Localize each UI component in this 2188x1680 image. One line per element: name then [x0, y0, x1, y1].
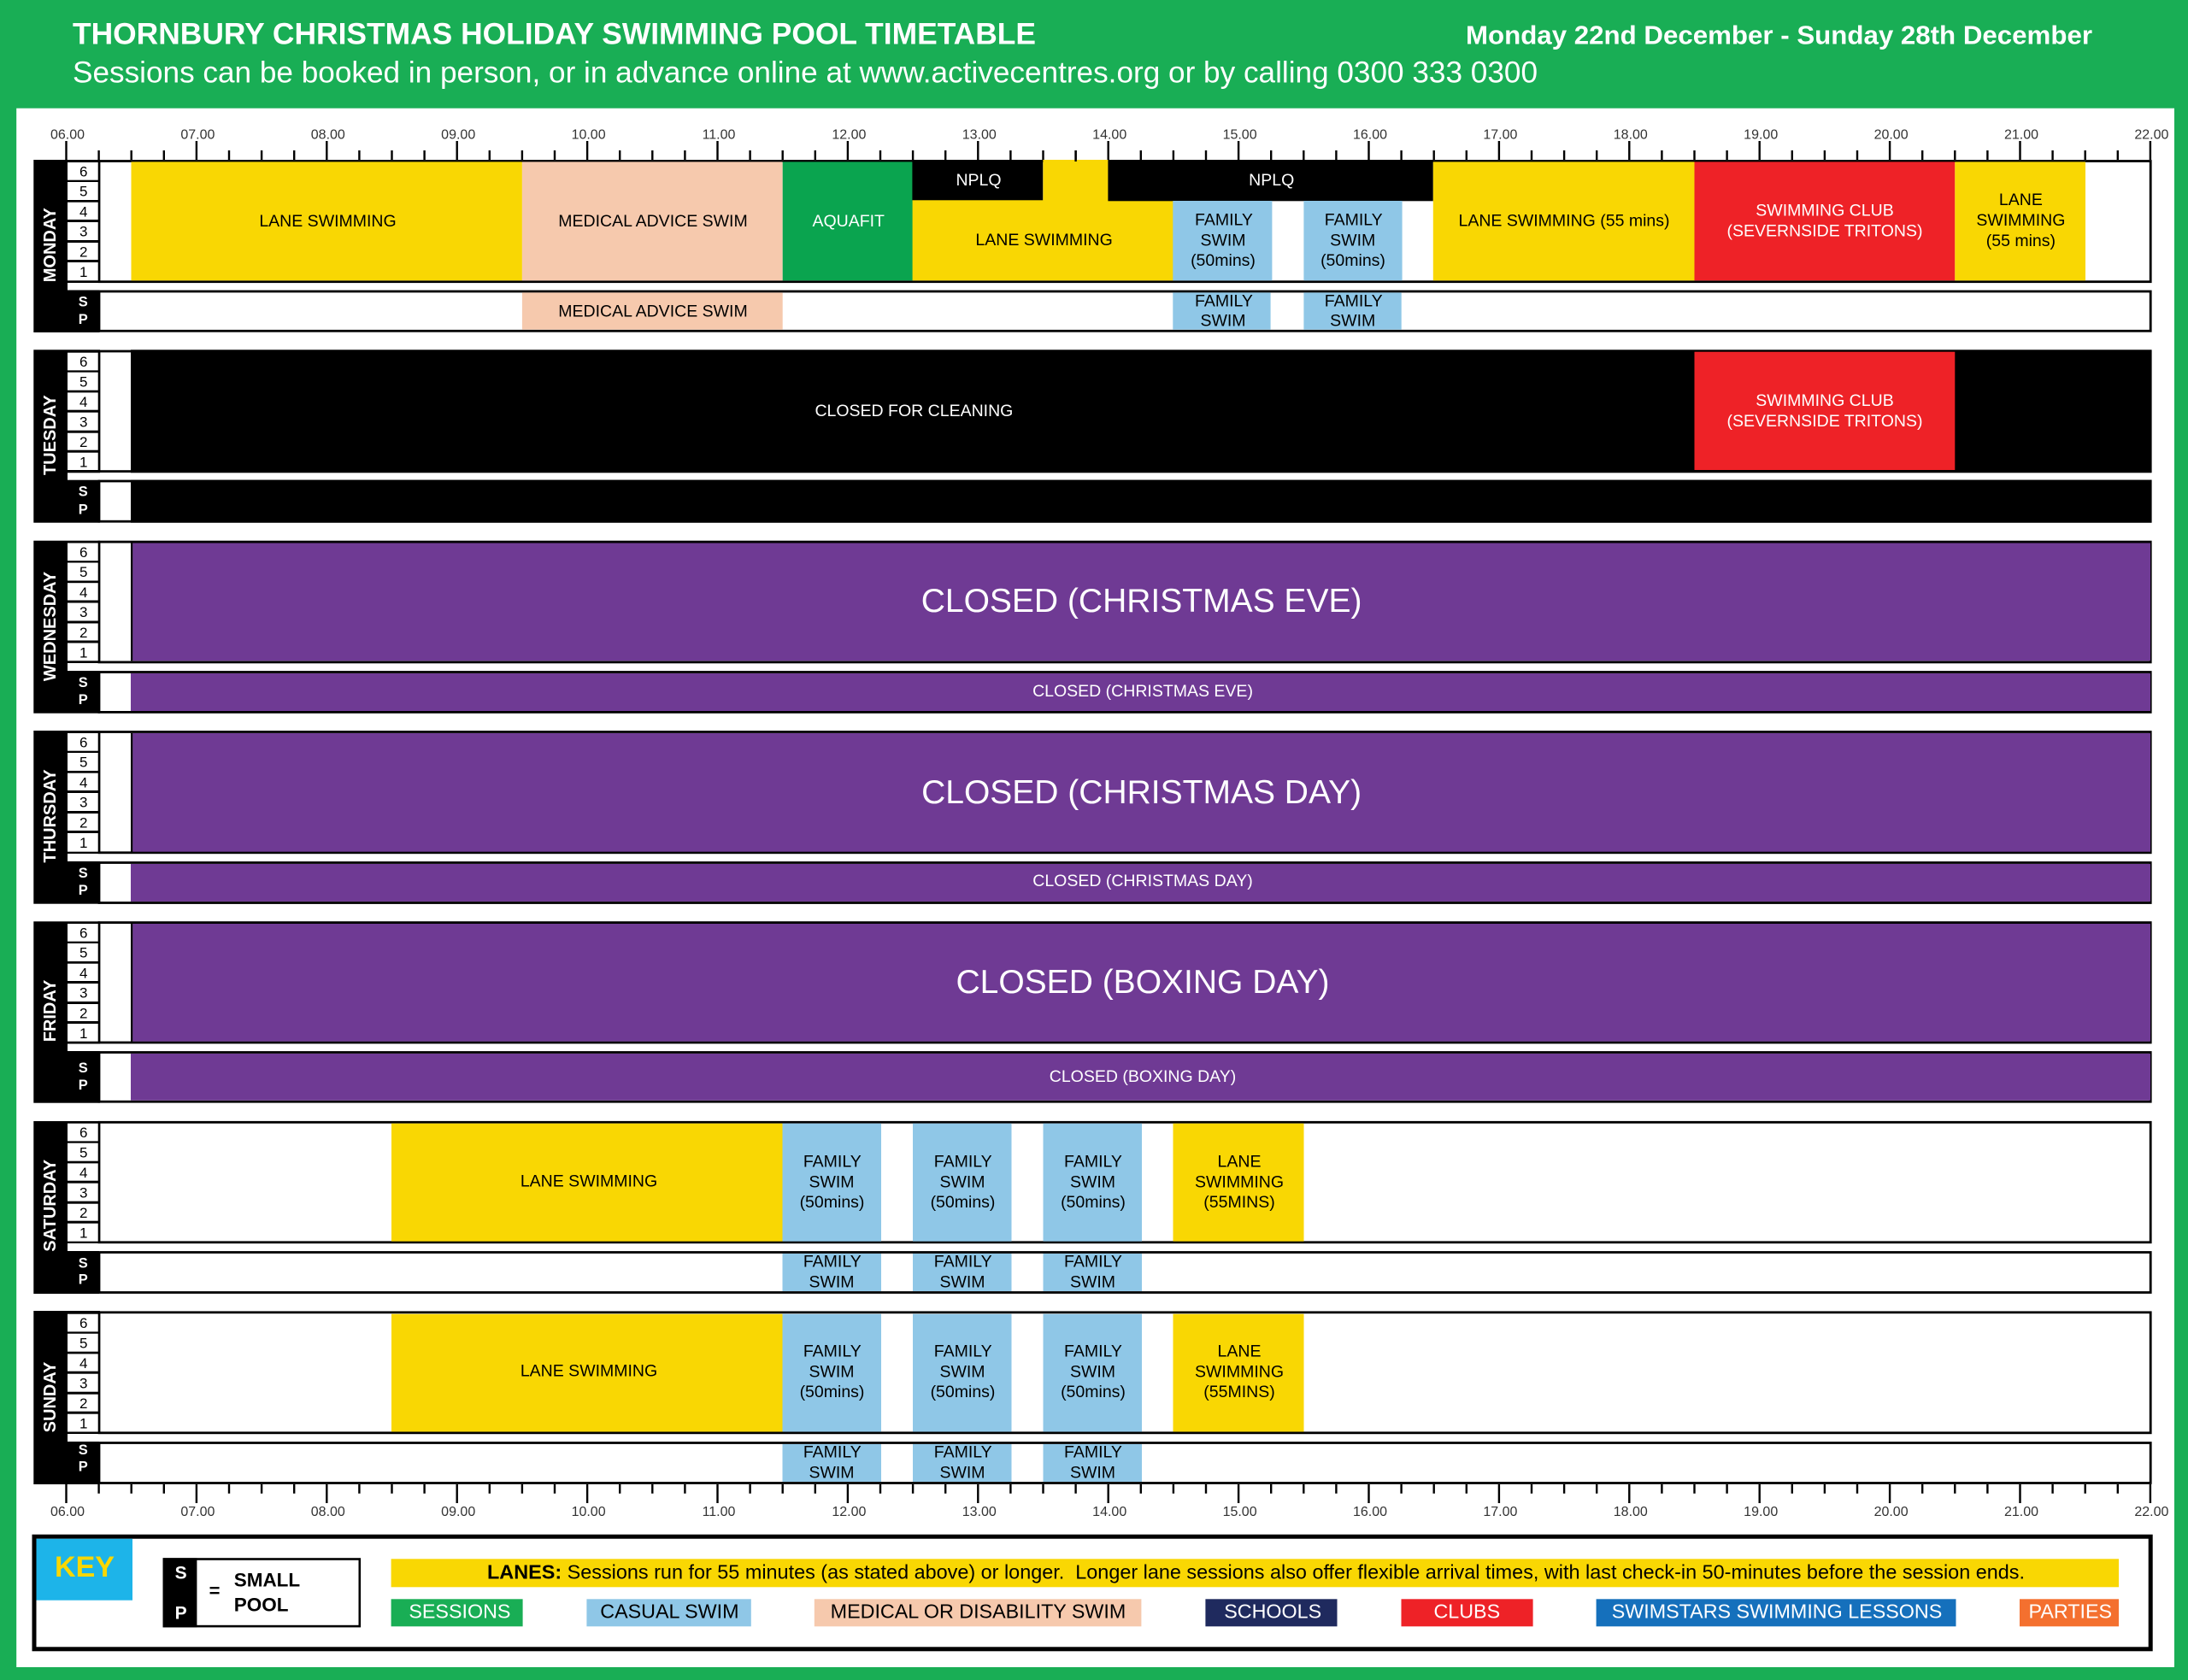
main pool sessions: LANE SWIMMING — [521, 1172, 657, 1191]
lane numbers: 4 — [79, 584, 87, 601]
lane numbers: 3 — [79, 414, 87, 430]
main pool: closed Christmas Eve: CLOSED (CHRISTMAS EVE) — [921, 583, 1362, 620]
legend: schools — [1205, 1599, 1337, 1626]
main pool sessions: SWIM — [1070, 1172, 1115, 1191]
main pool sessions: (50mins) — [1061, 1193, 1126, 1212]
small pool label — [79, 294, 88, 327]
small pool: closed — [131, 480, 2152, 523]
main pool: closed for cleaning — [131, 350, 2152, 473]
lane numbers: 3 — [79, 604, 87, 620]
small pool: closed Christmas Day: CLOSED (CHRISTMAS DAY) — [1032, 872, 1253, 890]
main pool sessions: SWIMMING CLUB — [1756, 202, 1894, 220]
panel: Wednesday — [33, 541, 2150, 714]
legend: clubs: CLUBS — [1433, 1600, 1500, 1622]
lane numbers — [68, 162, 98, 280]
day label: Saturday: SATURDAY — [41, 1159, 60, 1252]
bottom time axis: 15.00 — [1223, 1505, 1257, 1519]
small pool label: P — [79, 1078, 88, 1093]
main pool sessions: (50mins) — [1191, 251, 1256, 270]
top time axis: 22.00 — [2134, 128, 2169, 143]
key heading — [36, 1539, 132, 1601]
small pool: closed Boxing Day — [131, 1054, 2150, 1101]
lane numbers: 6 — [79, 734, 87, 750]
legend: casual swim: CASUAL SWIM — [600, 1600, 739, 1622]
small pool label: S — [79, 1060, 88, 1076]
small pool sessions: SWIM — [1200, 312, 1246, 331]
lane numbers: 4 — [79, 394, 87, 410]
top time axis: 20.00 — [1874, 128, 1909, 143]
top time axis: 08.00 — [311, 128, 345, 143]
small pool sessions: SWIM — [809, 1273, 855, 1292]
day label: Sunday: SUNDAY — [41, 1361, 60, 1432]
top time axis: 12.00 — [832, 128, 867, 143]
small pool sessions: SWIM — [939, 1273, 985, 1292]
main pool sessions: SWIMMING — [1195, 1362, 1284, 1381]
lane numbers: 5 — [79, 1335, 87, 1351]
lane numbers: 6 — [79, 1315, 87, 1331]
lane numbers: 4 — [79, 774, 87, 790]
lane numbers: 4 — [79, 965, 87, 981]
small pool sessions: FAMILY — [803, 1253, 862, 1272]
main pool sessions: SWIM — [1070, 1362, 1115, 1381]
bottom time axis: 22.00 — [2134, 1505, 2169, 1519]
legend: parties: PARTIES — [2029, 1600, 2112, 1622]
lane numbers: 6 — [79, 925, 87, 941]
lane numbers: 2 — [79, 1205, 87, 1221]
main pool: swimming club — [1694, 352, 1955, 470]
top time axis: 06.00 — [50, 128, 85, 143]
small pool explanation — [163, 1558, 360, 1627]
lanes note — [391, 1559, 2119, 1587]
lane numbers: 1 — [79, 455, 87, 471]
small pool sessions: FAMILY — [934, 1253, 992, 1272]
lane numbers: 5 — [79, 184, 87, 200]
main pool sessions: SWIM — [809, 1172, 855, 1191]
small pool sessions — [783, 1253, 1142, 1292]
small pool label: S — [79, 484, 88, 499]
small pool explanation: = — [209, 1580, 220, 1601]
top time axis: 10.00 — [572, 128, 606, 143]
small pool label: S — [79, 866, 88, 881]
top time axis: 21.00 — [2004, 128, 2038, 143]
bottom time axis: 14.00 — [1092, 1505, 1126, 1519]
main pool sessions — [391, 1124, 1304, 1242]
bottom time axis: 17.00 — [1483, 1505, 1518, 1519]
lane numbers: 5 — [79, 564, 87, 580]
lane numbers — [68, 353, 98, 471]
lane numbers: 1 — [79, 644, 87, 661]
top time axis: 19.00 — [1744, 128, 1778, 143]
main pool: closed Boxing Day — [131, 924, 2150, 1042]
lane numbers: 1 — [79, 835, 87, 851]
main pool sessions: FAMILY — [1064, 1153, 1122, 1172]
main pool sessions: SWIM — [809, 1362, 855, 1381]
lane numbers: 2 — [79, 1005, 87, 1021]
bottom time axis: 10.00 — [572, 1505, 606, 1519]
lane numbers: 3 — [79, 1184, 87, 1201]
lane numbers: 2 — [79, 814, 87, 831]
lane numbers: 4 — [79, 1165, 87, 1181]
small pool label: S — [79, 1442, 88, 1458]
top time axis: 14.00 — [1092, 128, 1126, 143]
bottom time axis — [50, 1484, 2169, 1519]
small pool sessions: FAMILY — [1325, 291, 1383, 310]
small pool label: P — [79, 883, 88, 898]
lane numbers: 4 — [79, 203, 87, 220]
bottom time axis: 13.00 — [962, 1505, 997, 1519]
top time axis: 13.00 — [962, 128, 997, 143]
lane numbers — [68, 733, 98, 852]
bottom time axis: 12.00 — [832, 1505, 867, 1519]
small pool sessions: FAMILY — [1195, 291, 1253, 310]
lane numbers: 1 — [79, 264, 87, 280]
legend: schools: SCHOOLS — [1224, 1600, 1321, 1622]
lane numbers: 5 — [79, 1144, 87, 1160]
top time axis: 11.00 — [703, 128, 736, 143]
small pool explanation: P — [175, 1603, 187, 1623]
lane numbers: 1 — [79, 1225, 87, 1242]
panel: key — [34, 1536, 2150, 1649]
panel: Thursday — [33, 731, 2150, 904]
small pool label: S — [79, 675, 88, 690]
main pool sessions: FAMILY — [803, 1153, 862, 1172]
small pool label — [79, 1442, 88, 1475]
top time axis: 18.00 — [1614, 128, 1648, 143]
lane numbers: 2 — [79, 1395, 87, 1412]
small pool explanation: SMALL — [234, 1570, 300, 1591]
date range: Monday 22nd December - Sunday 28th December — [1466, 21, 2092, 50]
lane numbers: 6 — [79, 544, 87, 561]
bottom time axis: 08.00 — [311, 1505, 345, 1519]
lane numbers: 1 — [79, 1025, 87, 1042]
main pool sessions: LANE — [1999, 191, 2043, 209]
main pool sessions: (50mins) — [931, 1193, 995, 1212]
top time axis: 16.00 — [1353, 128, 1387, 143]
small pool label: P — [79, 692, 88, 708]
main pool: closed Christmas Day: CLOSED (CHRISTMAS DAY) — [921, 774, 1362, 811]
small pool label: S — [79, 1255, 88, 1271]
small pool sessions: FAMILY — [1064, 1253, 1122, 1272]
bottom time axis: 21.00 — [2004, 1505, 2038, 1519]
main pool sessions: SWIMMING — [1195, 1172, 1284, 1191]
main pool: closed for cleaning: CLOSED FOR CLEANING — [815, 402, 1013, 420]
main pool sessions: SWIM — [939, 1172, 985, 1191]
legend: medical or disability swim: MEDICAL OR DISABILITY SWIM — [831, 1600, 1126, 1622]
small pool label: P — [79, 312, 88, 327]
bottom time axis: 11.00 — [703, 1505, 736, 1519]
lanes note: LANES: Sessions run for 55 minutes (as stated above) or longer. Longer lane sessions also offer flexible arrival times, with last check-in 50-minutes before the session ends. — [487, 1561, 2025, 1583]
panel: Tuesday — [33, 350, 2151, 523]
small pool label: S — [79, 294, 88, 309]
main pool sessions: (55 mins) — [1986, 232, 2056, 250]
main pool sessions: LANE SWIMMING — [259, 212, 397, 231]
main pool sessions: SWIM — [1330, 231, 1375, 250]
main pool sessions: (50mins) — [1061, 1383, 1126, 1401]
day label: Tuesday: TUESDAY — [41, 395, 60, 475]
bottom time axis: 16.00 — [1353, 1505, 1387, 1519]
main pool sessions: (50mins) — [800, 1383, 864, 1401]
lane numbers: 2 — [79, 434, 87, 450]
main pool sessions — [391, 1314, 1304, 1432]
top time axis: 17.00 — [1483, 128, 1518, 143]
small pool label — [79, 1255, 88, 1288]
day label: Wednesday: WEDNESDAY — [41, 571, 60, 681]
small pool sessions: FAMILY — [934, 1443, 992, 1462]
main pool sessions: LANE SWIMMING — [521, 1362, 657, 1381]
bottom time axis: 07.00 — [180, 1505, 215, 1519]
top time axis: 09.00 — [441, 128, 475, 143]
main pool: closed Christmas Eve — [131, 543, 2150, 661]
legend: sessions — [391, 1599, 523, 1626]
lane numbers — [68, 1124, 98, 1242]
main pool sessions: FAMILY — [803, 1342, 862, 1361]
main pool sessions: (50mins) — [800, 1193, 864, 1212]
lane numbers: 5 — [79, 373, 87, 390]
main pool sessions: FAMILY — [934, 1153, 992, 1172]
small pool sessions: SWIM — [1070, 1273, 1115, 1292]
main pool sessions: (50mins) — [1320, 251, 1385, 270]
lane numbers: 3 — [79, 985, 87, 1002]
day label: Thursday: THURSDAY — [41, 769, 60, 863]
small pool explanation: POOL — [234, 1595, 289, 1616]
main pool sessions: (55MINS) — [1203, 1383, 1275, 1401]
small pool label: P — [79, 1272, 88, 1288]
main pool sessions: FAMILY — [934, 1342, 992, 1361]
main pool sessions: NPLQ — [1249, 171, 1294, 190]
lane numbers: 6 — [79, 163, 87, 179]
main pool sessions: SWIM — [1200, 231, 1246, 250]
small pool sessions: SWIM — [1070, 1464, 1115, 1483]
main pool sessions: LANE — [1218, 1342, 1261, 1361]
small pool label — [79, 484, 88, 518]
main pool sessions: FAMILY — [1195, 210, 1253, 229]
main pool sessions: (50mins) — [931, 1383, 995, 1401]
small pool explanation: S — [175, 1563, 187, 1583]
bottom time axis: 20.00 — [1874, 1505, 1909, 1519]
top time axis — [50, 128, 2169, 162]
lane numbers: 3 — [79, 224, 87, 240]
bottom time axis: 19.00 — [1744, 1505, 1778, 1519]
title: THORNBURY CHRISTMAS HOLIDAY SWIMMING POOL TIMETABLE — [73, 18, 1036, 51]
small pool sessions: MEDICAL ADVICE SWIM — [558, 303, 748, 321]
lane numbers: 4 — [79, 1355, 87, 1372]
small pool label — [79, 1060, 88, 1093]
main pool sessions: SWIM — [939, 1362, 985, 1381]
lane numbers: 2 — [79, 244, 87, 260]
lane numbers — [68, 1314, 98, 1432]
bottom time axis: 09.00 — [441, 1505, 475, 1519]
small pool: closed Christmas Day — [131, 864, 2150, 902]
bottom time axis: 06.00 — [50, 1505, 85, 1519]
panel: Friday — [33, 921, 2150, 1103]
main pool sessions: LANE — [1218, 1153, 1261, 1172]
top time axis: 07.00 — [180, 128, 215, 143]
small pool label — [79, 675, 88, 708]
main pool: closed Christmas Day — [131, 733, 2150, 852]
main pool: swimming club: (SEVERNSIDE TRITONS) — [1727, 412, 1922, 431]
main pool sessions: FAMILY — [1325, 210, 1383, 229]
panel: Monday — [33, 150, 2150, 332]
panel: Saturday — [33, 1121, 2150, 1294]
main pool sessions — [132, 150, 2085, 280]
main pool sessions: LANE SWIMMING (55 mins) — [1458, 212, 1670, 231]
lane numbers: 2 — [79, 625, 87, 641]
top time axis: 15.00 — [1223, 128, 1257, 143]
lane numbers: 1 — [79, 1416, 87, 1432]
booking information: Sessions can be booked in person, or in advance online at www.activecentres.org or by calling 0300 333 0300 — [73, 56, 1538, 90]
key heading: KEY — [55, 1551, 115, 1583]
small pool sessions: FAMILY — [803, 1443, 862, 1462]
main pool sessions: LANE SWIMMING — [975, 231, 1113, 250]
main pool: closed Boxing Day: CLOSED (BOXING DAY) — [956, 964, 1330, 1001]
small pool sessions — [783, 1443, 1142, 1483]
lane numbers — [68, 543, 98, 661]
panel: Sunday — [33, 1311, 2150, 1484]
small pool label: P — [79, 1460, 88, 1475]
lane numbers — [68, 924, 98, 1042]
legend: casual swim — [586, 1599, 751, 1626]
lane numbers: 6 — [79, 354, 87, 370]
lane numbers: 6 — [79, 1125, 87, 1141]
main pool sessions: MEDICAL ADVICE SWIM — [558, 212, 748, 231]
lane numbers: 5 — [79, 755, 87, 771]
legend: swimstars swimming lessons: SWIMSTARS SWIMMING LESSONS — [1612, 1600, 1942, 1622]
day label: Friday: FRIDAY — [41, 979, 60, 1042]
main pool sessions: AQUAFIT — [812, 212, 885, 231]
day label: Monday: MONDAY — [41, 208, 60, 282]
legend: parties — [2020, 1599, 2119, 1626]
small pool sessions: SWIM — [939, 1464, 985, 1483]
small pool: closed Christmas Eve — [131, 673, 2150, 711]
legend: clubs — [1402, 1599, 1533, 1626]
small pool sessions: FAMILY — [1064, 1443, 1122, 1462]
main pool sessions: SWIMMING — [1976, 211, 2065, 230]
small pool sessions: SWIM — [1330, 312, 1375, 331]
bottom time axis: 18.00 — [1614, 1505, 1648, 1519]
small pool sessions: SWIM — [809, 1464, 855, 1483]
legend: sessions: SESSIONS — [409, 1600, 510, 1622]
small pool sessions — [522, 291, 1402, 331]
lane numbers: 3 — [79, 1375, 87, 1391]
main pool sessions: (SEVERNSIDE TRITONS) — [1727, 222, 1922, 241]
lane numbers: 3 — [79, 795, 87, 811]
main pool sessions: (55MINS) — [1203, 1193, 1275, 1212]
main pool: swimming club: SWIMMING CLUB — [1756, 391, 1894, 410]
main pool sessions: FAMILY — [1064, 1342, 1122, 1361]
main pool sessions: NPLQ — [956, 171, 1002, 190]
small pool label — [79, 866, 88, 898]
small pool: closed Christmas Eve: CLOSED (CHRISTMAS EVE) — [1032, 682, 1253, 701]
lane numbers: 5 — [79, 945, 87, 961]
small pool: closed Boxing Day: CLOSED (BOXING DAY) — [1050, 1067, 1236, 1086]
small pool label: P — [79, 502, 88, 518]
